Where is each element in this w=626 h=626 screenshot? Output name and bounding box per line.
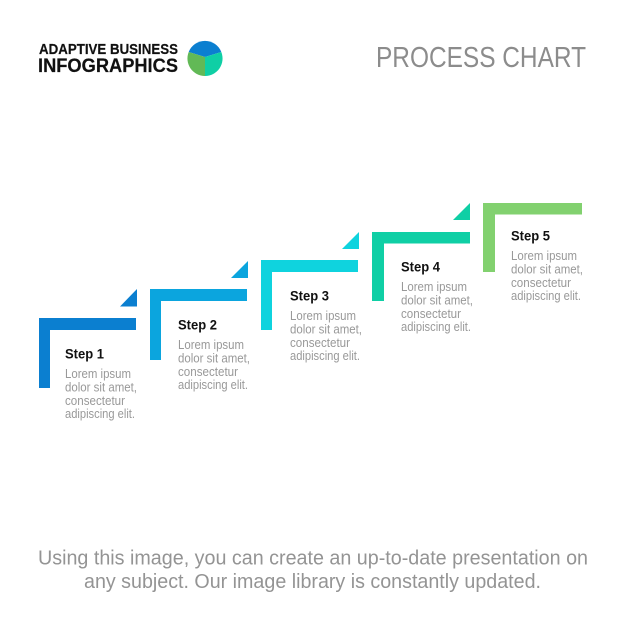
label 4: Step 4	[401, 258, 440, 274]
footer description	[38, 548, 588, 593]
text 4: dolor sit amet,	[401, 294, 473, 308]
text 1: consectetur	[65, 394, 125, 408]
text 5: consectetur	[511, 276, 571, 290]
footer description: any subject. Our image library is constantly updated.	[84, 571, 541, 593]
text 3: Lorem ipsum	[290, 309, 356, 323]
text 5: adipiscing elit.	[511, 289, 581, 303]
step 5	[483, 203, 583, 303]
label 3: Step 3	[290, 288, 329, 304]
text 1: adipiscing elit.	[65, 407, 135, 421]
step 1	[39, 289, 137, 421]
bracket 2	[150, 289, 247, 360]
arrow triangle 2	[231, 261, 248, 278]
icon: pie circle	[187, 41, 223, 76]
title: PROCESS CHART	[376, 42, 586, 74]
text 1	[65, 367, 137, 421]
text 3: adipiscing elit.	[290, 349, 360, 363]
logo text: ADAPTIVE BUSINESS	[39, 42, 178, 58]
text 4: consectetur	[401, 307, 461, 321]
text 1: Lorem ipsum	[65, 367, 131, 381]
bracket 5	[483, 203, 582, 272]
text 4: adipiscing elit.	[401, 320, 471, 334]
bracket 4	[372, 232, 470, 301]
text 3: consectetur	[290, 336, 350, 350]
text 1: dolor sit amet,	[65, 380, 137, 394]
text 3	[290, 309, 362, 363]
label 5: Step 5	[511, 228, 550, 244]
text 2: Lorem ipsum	[178, 338, 244, 352]
label 1: Step 1	[65, 346, 104, 362]
logo text	[38, 42, 178, 77]
text 5	[511, 249, 583, 303]
arrow triangle 1	[120, 289, 137, 306]
arrow triangle 3	[342, 232, 359, 249]
bracket 3	[261, 260, 358, 330]
text 4	[401, 280, 473, 334]
text 5: Lorem ipsum	[511, 249, 577, 263]
step 3	[261, 232, 362, 363]
arrow triangle 4	[453, 203, 470, 220]
footer description: Using this image, you can create an up-to-date presentation on	[38, 548, 588, 570]
text 2	[178, 338, 250, 392]
text 3: dolor sit amet,	[290, 322, 362, 336]
bracket 1	[39, 318, 136, 388]
text 5: dolor sit amet,	[511, 262, 583, 276]
logo	[38, 41, 223, 77]
label 2: Step 2	[178, 316, 217, 332]
step 2	[150, 261, 250, 392]
text 2: consectetur	[178, 365, 238, 379]
text 2: adipiscing elit.	[178, 378, 248, 392]
step 4	[372, 203, 473, 334]
text 4: Lorem ipsum	[401, 280, 467, 294]
text 2: dolor sit amet,	[178, 352, 250, 366]
logo text: INFOGRAPHICS	[38, 55, 178, 77]
